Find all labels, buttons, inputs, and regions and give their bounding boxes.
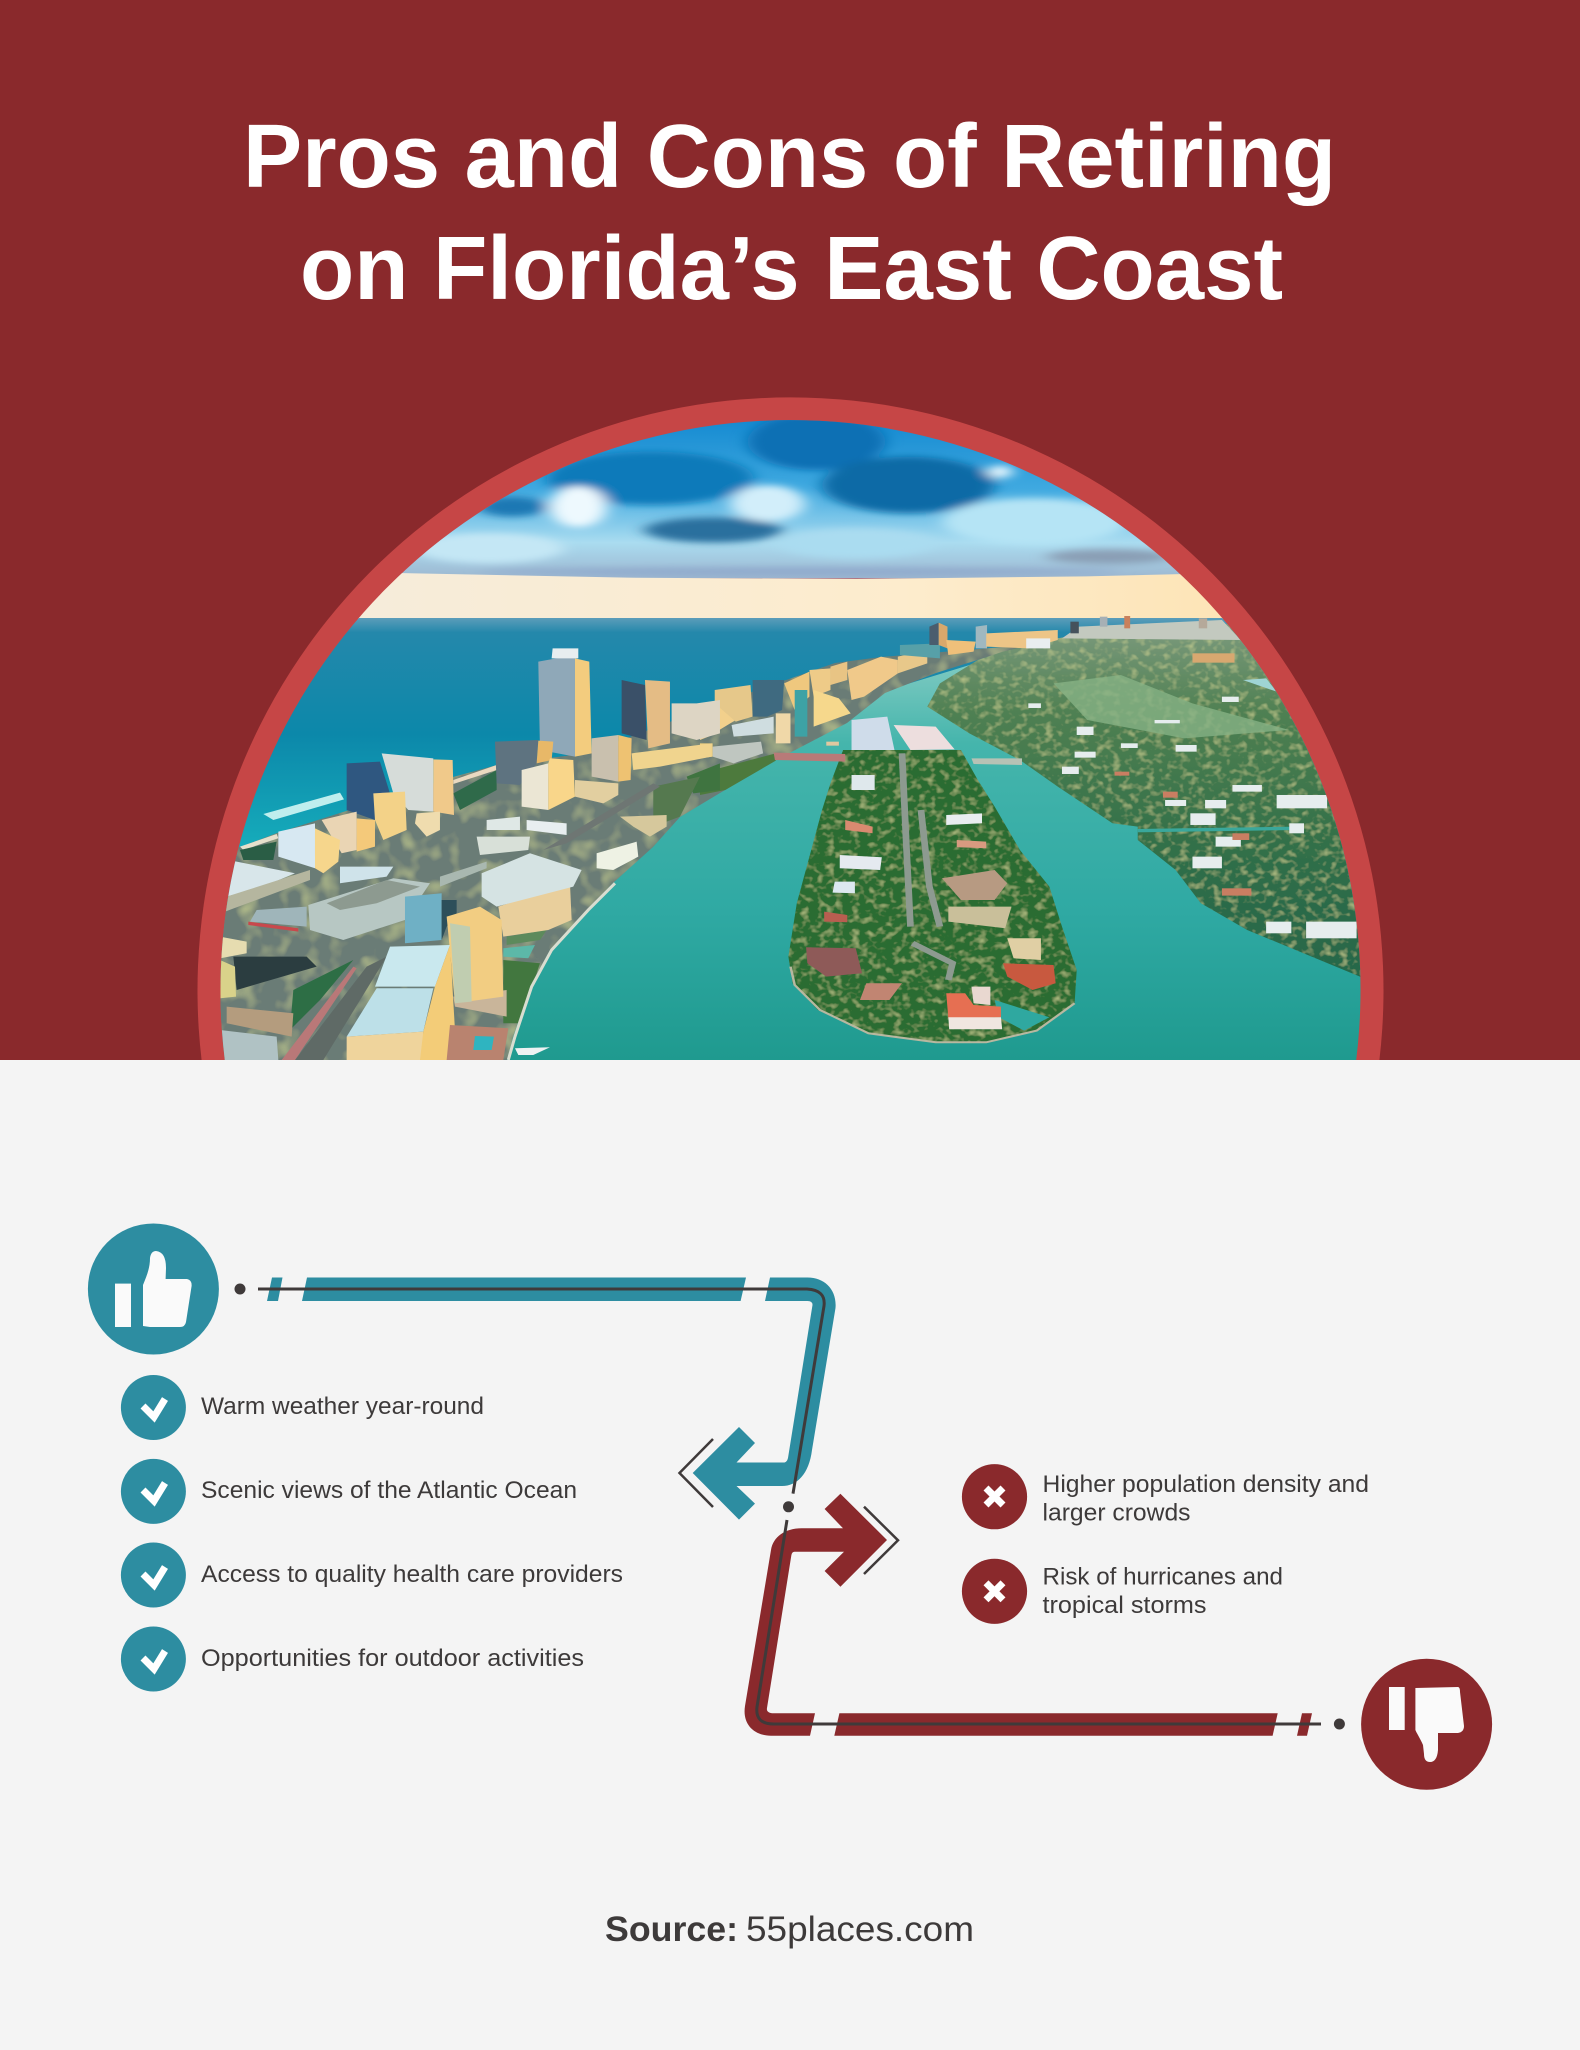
- pro item: warm weather: Warm weather year-round: [201, 1393, 484, 1420]
- island houses: [806, 717, 1056, 1031]
- source line: [605, 1910, 974, 1949]
- chevron: [680, 1439, 713, 1507]
- glass block: [405, 893, 442, 943]
- title: Pros and Cons of Retiring: [243, 107, 1336, 207]
- con item: hurricanes: tropical storms: [1042, 1592, 1206, 1619]
- dark line: [757, 1520, 1321, 1724]
- pro item: warm weather: [121, 1375, 484, 1440]
- con item: hurricanes: Risk of hurricanes and: [1042, 1564, 1283, 1590]
- waterway: [200, 638, 1380, 1060]
- central island: [788, 750, 1077, 1042]
- pro item: health care: Access to quality health care providers: [201, 1561, 623, 1588]
- yellow block: [453, 990, 507, 1017]
- right shore red roofs: [1115, 772, 1251, 896]
- boat: [515, 1047, 550, 1055]
- island roads: [902, 753, 953, 980]
- sea wall: [508, 883, 615, 1060]
- right shore land: [927, 624, 1360, 977]
- left city, drawn in crop coordinates: [220, 648, 720, 1060]
- pro item: outdoor activities: Opportunities for outdoor activities: [201, 1645, 584, 1672]
- header panel: [0, 0, 1580, 1060]
- cons list: [962, 1464, 1369, 1624]
- dot: end of cons line: [1334, 1718, 1345, 1730]
- icon: thumbs up: [88, 1224, 219, 1354]
- horizon band: [358, 573, 1223, 619]
- chevron: [864, 1507, 898, 1574]
- con item: population density: [962, 1464, 1369, 1529]
- source line: Source:: [605, 1910, 738, 1949]
- mid-rise block: [308, 878, 430, 940]
- curved hotel: [498, 883, 572, 937]
- island sea wall: [790, 967, 1075, 1042]
- pro item: health care: [121, 1542, 623, 1608]
- pros list: [121, 1375, 623, 1692]
- canal: [1138, 828, 1298, 831]
- city roads: [295, 957, 387, 1060]
- pro item: scenic views: Scenic views of the Atlantic Ocean: [201, 1477, 577, 1504]
- sky and clouds: [396, 420, 1184, 579]
- bridges: [774, 753, 1022, 765]
- right shore and island, drawn in crop coordinates: [700, 616, 1390, 1042]
- right shore houses: [1028, 697, 1357, 938]
- dot: centre junction: [783, 1501, 794, 1512]
- pros connector arrow: [258, 1278, 836, 1520]
- greenery: [453, 770, 497, 810]
- ocean: [200, 618, 1380, 908]
- title: on Florida’s East Coast: [300, 219, 1283, 319]
- icon: thumbs down: [1361, 1659, 1492, 1790]
- shoreline towers: [672, 700, 720, 740]
- left city land: [200, 638, 1058, 1060]
- pool deck: [447, 1025, 508, 1060]
- far left buildings: [220, 960, 236, 998]
- con item: population density: larger crowds: [1042, 1500, 1190, 1526]
- distant city: [1062, 616, 1241, 663]
- tall tower: [538, 655, 575, 757]
- con item: population density: Higher population density and: [1042, 1471, 1369, 1498]
- coast buildings far: [700, 623, 1058, 795]
- teal band segments: [267, 1278, 836, 1520]
- title: [243, 107, 1336, 319]
- beach and surf: [453, 765, 497, 784]
- dot: start of pros line: [234, 1284, 246, 1294]
- lagoon: [1243, 678, 1277, 692]
- photo ring: [197, 397, 1384, 1060]
- aerial photo of Florida coast: [196, 413, 1431, 1060]
- dark line: [258, 1289, 824, 1494]
- cons connector arrow: [745, 1494, 1321, 1736]
- golf course: [1054, 675, 1289, 738]
- pro item: scenic views: [121, 1459, 577, 1524]
- foreground building: [375, 945, 450, 987]
- pro item: outdoor activities: [121, 1626, 584, 1692]
- con item: hurricanes: [962, 1559, 1283, 1624]
- left cluster: [347, 762, 390, 820]
- maroon band segments: [745, 1494, 1312, 1736]
- source line: 55places.com: [746, 1910, 974, 1949]
- small blocks: [487, 817, 520, 830]
